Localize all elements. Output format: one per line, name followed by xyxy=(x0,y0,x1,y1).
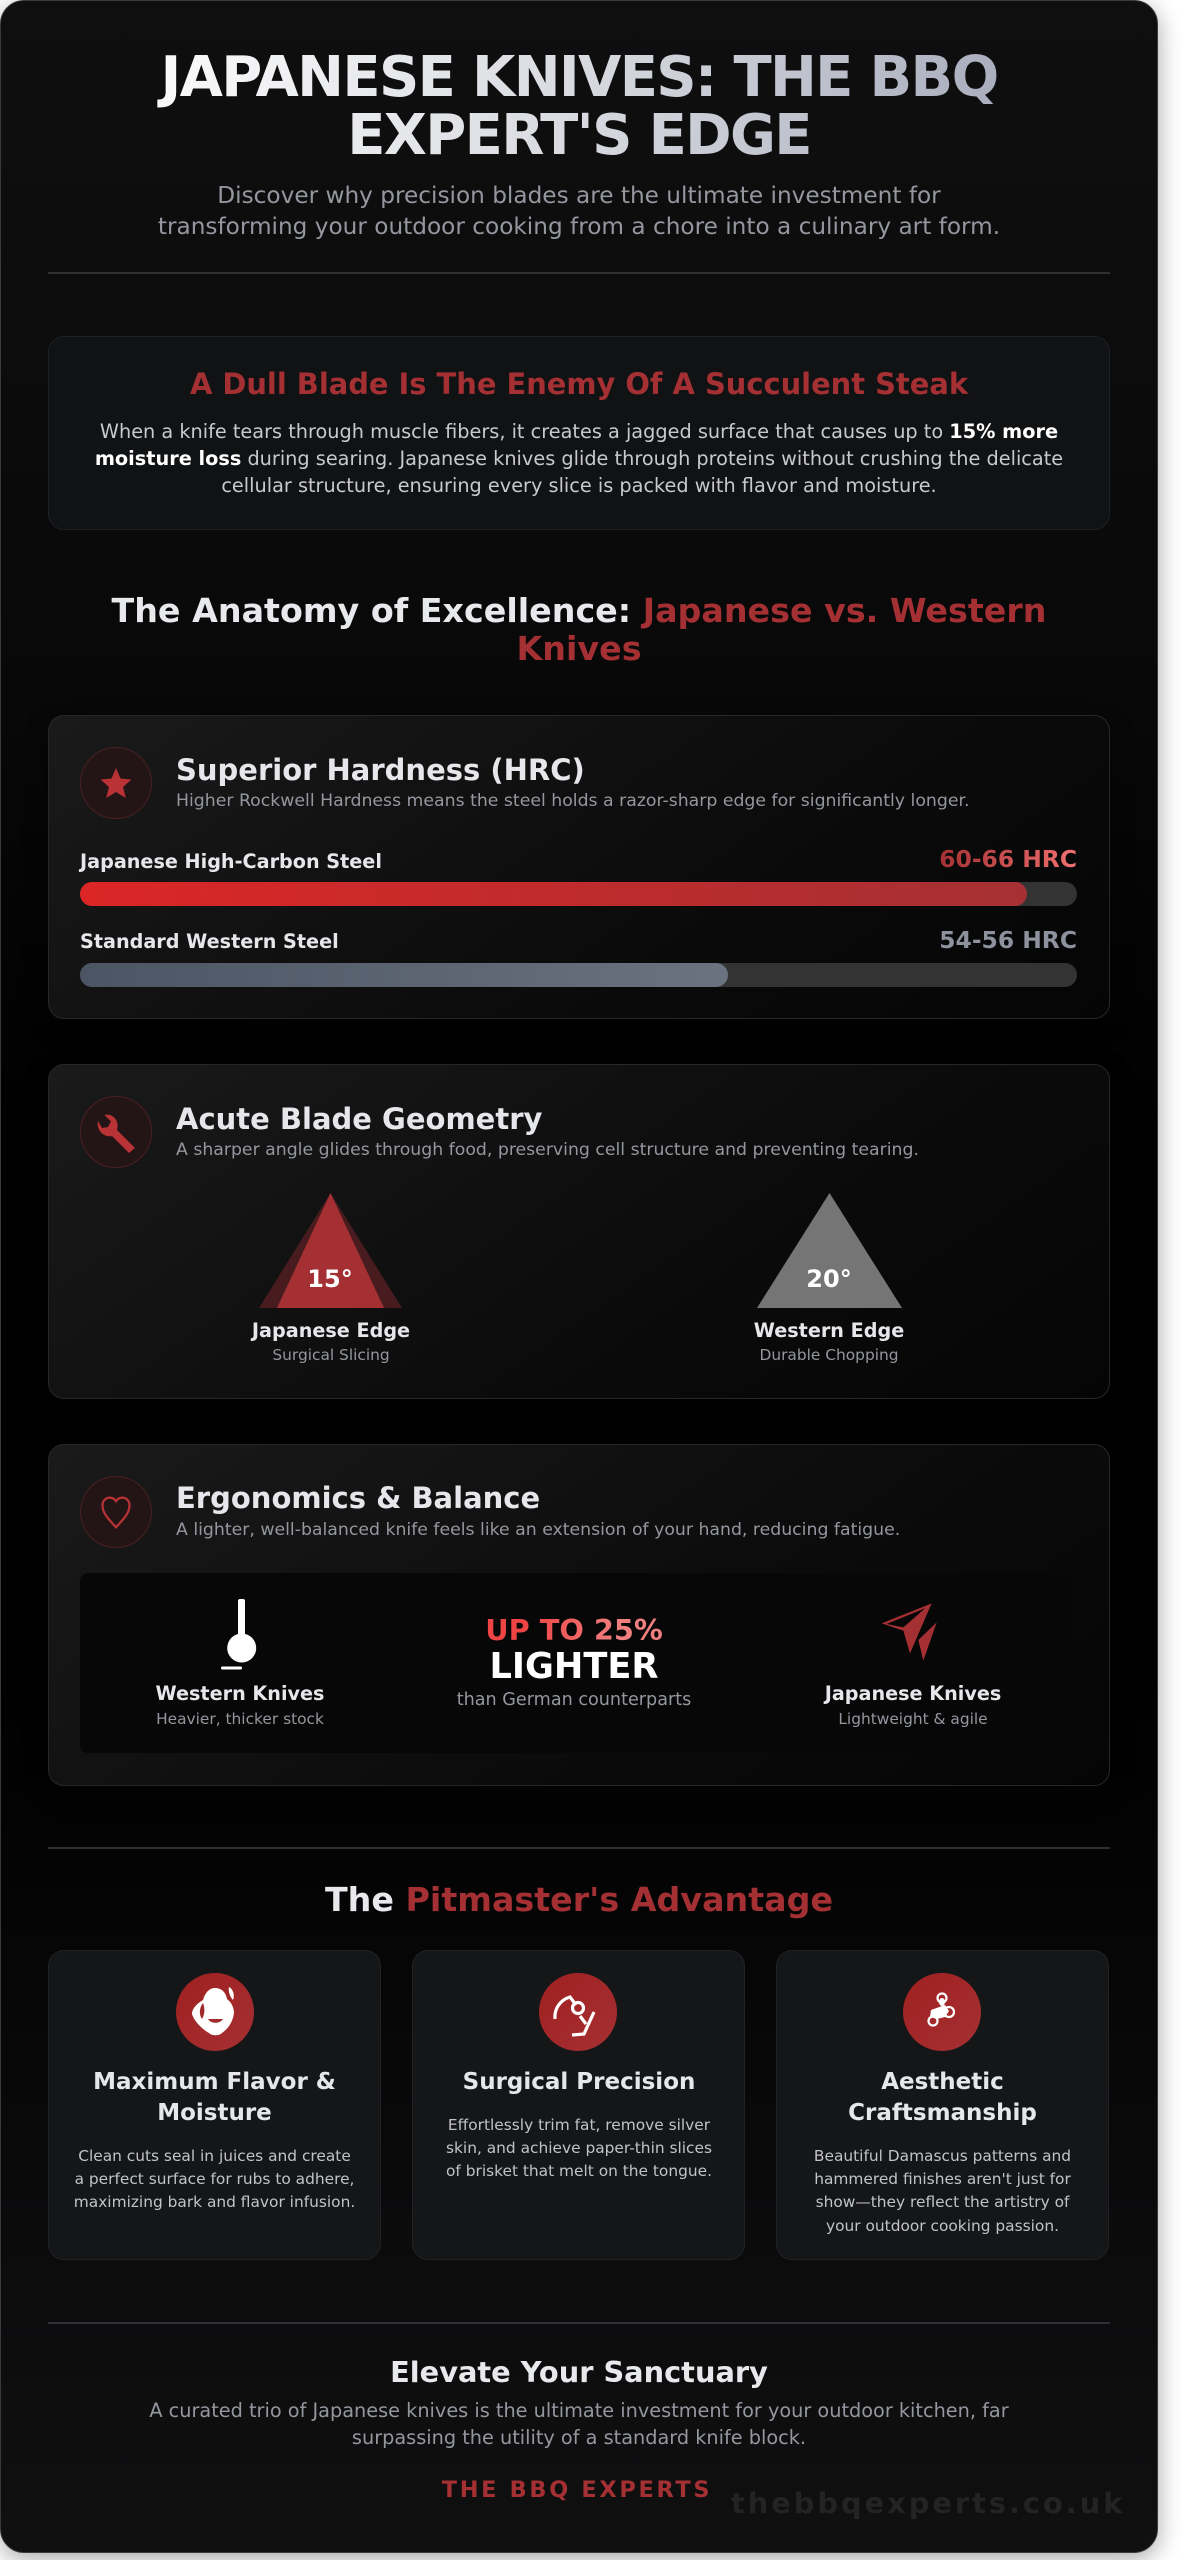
intro body text: When a knife tears through muscle fibers, it creates a jagged surface that causes up to 15% more xyxy=(100,420,1058,443)
subtitle xyxy=(158,182,1000,240)
craftsmanship title: Craftsmanship xyxy=(848,2100,1037,2126)
intro heading: A Dull Blade Is The Enemy Of A Succulent Steak xyxy=(190,367,968,401)
bar: japanese steel xyxy=(80,882,1077,906)
card: flavor xyxy=(48,1950,381,2260)
craftsmanship title: Aesthetic xyxy=(881,2069,1004,2095)
japanese edge label: Japanese Edge xyxy=(252,1319,410,1342)
brand footer: THE BBQ EXPERTS xyxy=(442,2477,712,2503)
value: japanese hrc: 60-66 HRC xyxy=(939,845,1077,873)
geometry title: Acute Blade Geometry xyxy=(176,1102,542,1136)
icon: western knife xyxy=(221,1599,256,1670)
icon: flavor xyxy=(176,1973,254,2051)
section heading: anatomy: The Anatomy of Excellence: Japanese vs. Western xyxy=(112,591,1046,630)
precision title: Surgical Precision xyxy=(463,2069,695,2095)
western edge label: Western Edge xyxy=(754,1319,904,1342)
subtitle: transforming your outdoor cooking from a chore into a culinary art form. xyxy=(158,213,1000,240)
western knives sub: Heavier, thicker stock xyxy=(156,1710,324,1728)
hardness description: Higher Rockwell Hardness means the steel holds a razor-sharp edge for significantly longer. xyxy=(176,791,969,811)
title: EXPERT'S EDGE xyxy=(347,103,811,168)
title: JAPANESE KNIVES: THE BBQ xyxy=(160,45,998,110)
flavor body xyxy=(74,2147,355,2211)
precision body: Effortlessly trim fat, remove silver xyxy=(448,2116,710,2134)
craftsmanship body xyxy=(814,2147,1071,2235)
card: precision xyxy=(412,1950,745,2260)
precision body: skin, and achieve paper-thin slices xyxy=(446,2139,712,2157)
bar fill 95% xyxy=(80,882,1027,906)
geometry description: A sharper angle glides through food, preserving cell structure and preventing tearing. xyxy=(176,1140,919,1160)
japanese knives sub: Lightweight & agile xyxy=(838,1710,988,1728)
bar: western steel xyxy=(80,963,1077,987)
value: western hrc: 54-56 HRC xyxy=(939,926,1077,954)
precision body xyxy=(446,2116,712,2180)
icon: wrench xyxy=(80,1096,152,1168)
section heading: anatomy xyxy=(112,591,1046,668)
panel: dull blade intro xyxy=(48,336,1110,530)
craftsmanship body: show—they reflect the artistry of xyxy=(816,2193,1069,2211)
flavor body: maximizing bark and flavor infusion. xyxy=(74,2193,355,2211)
icon: japanese knife xyxy=(882,1604,937,1660)
icon: craftsmanship xyxy=(903,1973,981,2051)
stat: up to 25% xyxy=(424,1612,724,1648)
panel: ergonomics xyxy=(48,1444,1110,1786)
label: western steel: Standard Western Steel xyxy=(80,930,339,953)
panel: hardness xyxy=(48,715,1110,1019)
angle label 20: 20° xyxy=(806,1265,852,1293)
craftsmanship title xyxy=(848,2069,1037,2126)
ergonomics description: A lighter, well-balanced knife feels like an extension of your hand, reducing fatigue. xyxy=(176,1520,900,1540)
section heading: anatomy: Knives xyxy=(516,629,642,668)
panel: weight comparison xyxy=(80,1573,1077,1753)
title xyxy=(48,49,1110,165)
icon: precision xyxy=(539,1973,617,2051)
card: craftsmanship xyxy=(776,1950,1109,2260)
closing text xyxy=(149,2399,1009,2449)
flavor title: Moisture xyxy=(157,2100,272,2126)
stat: up to 25%: UP TO 25% xyxy=(485,1613,663,1647)
flavor body: a perfect surface for rubs to adhere, xyxy=(75,2170,354,2188)
closing heading: Elevate Your Sanctuary xyxy=(390,2355,768,2389)
bar fill 65% xyxy=(80,963,728,987)
icon: star xyxy=(80,747,152,819)
watermark: thebbqexperts.co.uk xyxy=(731,2486,1125,2520)
craftsmanship body: your outdoor cooking passion. xyxy=(826,2217,1059,2235)
flavor title xyxy=(93,2069,336,2126)
japanese edge sub: Surgical Slicing xyxy=(272,1346,390,1364)
icon: heart xyxy=(80,1476,152,1548)
stat caption: than German counterparts xyxy=(457,1690,691,1710)
section heading: pitmaster: The Pitmaster's Advantage xyxy=(325,1880,833,1919)
flavor title: Maximum Flavor & xyxy=(93,2069,336,2095)
panel: blade geometry xyxy=(48,1064,1110,1399)
ergonomics title: Ergonomics & Balance xyxy=(176,1481,540,1515)
stat: lighter: LIGHTER xyxy=(490,1646,658,1687)
flavor body: Clean cuts seal in juices and create xyxy=(78,2147,351,2165)
closing text: surpassing the utility of a standard knife block. xyxy=(352,2426,806,2449)
japanese knives label: Japanese Knives xyxy=(825,1682,1001,1705)
diagram: western edge xyxy=(757,1193,902,1308)
precision body: of brisket that melt on the tongue. xyxy=(446,2162,712,2180)
intro body text: moisture loss during searing. Japanese knives glide through proteins without crushing the delicate xyxy=(95,447,1063,470)
label: japanese steel: Japanese High-Carbon Steel xyxy=(80,850,382,873)
closing text: A curated trio of Japanese knives is the ultimate investment for your outdoor kitchen, far xyxy=(149,2399,1009,2422)
intro body text: cellular structure, ensuring every slice is packed with flavor and moisture. xyxy=(221,474,937,497)
intro body text xyxy=(95,420,1063,497)
craftsmanship body: Beautiful Damascus patterns and xyxy=(814,2147,1071,2165)
western knives label: Western Knives xyxy=(156,1682,324,1705)
angle label 15: 15° xyxy=(307,1265,353,1293)
subtitle: Discover why precision blades are the ultimate investment for xyxy=(217,182,941,209)
hardness title: Superior Hardness (HRC) xyxy=(176,753,585,787)
craftsmanship body: hammered finishes aren't just for xyxy=(814,2170,1071,2188)
western edge sub: Durable Chopping xyxy=(759,1346,899,1364)
diagram: japanese edge xyxy=(259,1193,402,1308)
